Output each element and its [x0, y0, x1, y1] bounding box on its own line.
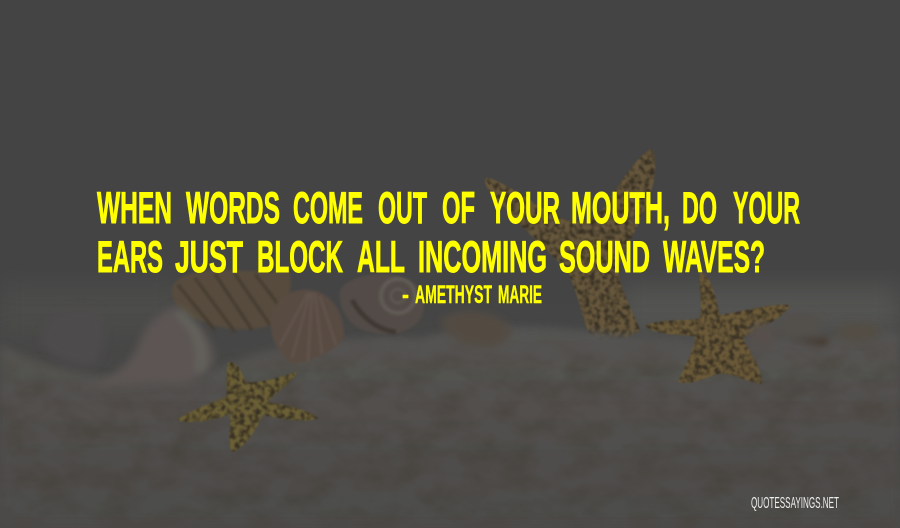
background: right starfish: [645, 272, 790, 384]
background: nautilus shell: [340, 274, 424, 334]
quote card: [0, 149, 900, 527]
background: large ribbed shell: [172, 270, 291, 332]
author attribution: MARIE: [498, 281, 542, 309]
quote text: SOUND: [559, 233, 650, 282]
quote text: JUST: [175, 233, 243, 282]
background: left pale shell: [40, 307, 105, 366]
quote text: YOUR: [490, 184, 560, 233]
quote text: WAVES?: [663, 233, 765, 282]
quote text: WORDS: [186, 184, 280, 233]
quote text: WHEN: [97, 184, 172, 233]
quote text: INCOMING: [418, 233, 547, 282]
quote text: ALL: [357, 233, 405, 282]
quote text: COME: [293, 184, 363, 233]
quote text: YOUR: [733, 184, 800, 233]
quote text: OUT: [378, 184, 427, 233]
background: pale horizon band: [0, 285, 900, 335]
background: scallop shell: [271, 290, 344, 364]
quote text: BLOCK: [257, 233, 343, 282]
author attribution: -: [402, 281, 409, 309]
background: right shells: [749, 312, 880, 347]
author attribution: AMETHYST: [415, 281, 492, 309]
quote text: DO: [682, 184, 717, 233]
quote text: [97, 184, 800, 282]
background: conch shell: [82, 306, 215, 388]
quote text: MOUTH,: [571, 184, 670, 233]
quote text: EARS: [97, 233, 163, 282]
background: big starfish: [485, 149, 655, 340]
background: small starfish: [177, 362, 318, 452]
background: sand: [1, 327, 898, 486]
background: shell behind quote attribution: [440, 311, 512, 347]
quote text: OF: [442, 184, 475, 233]
